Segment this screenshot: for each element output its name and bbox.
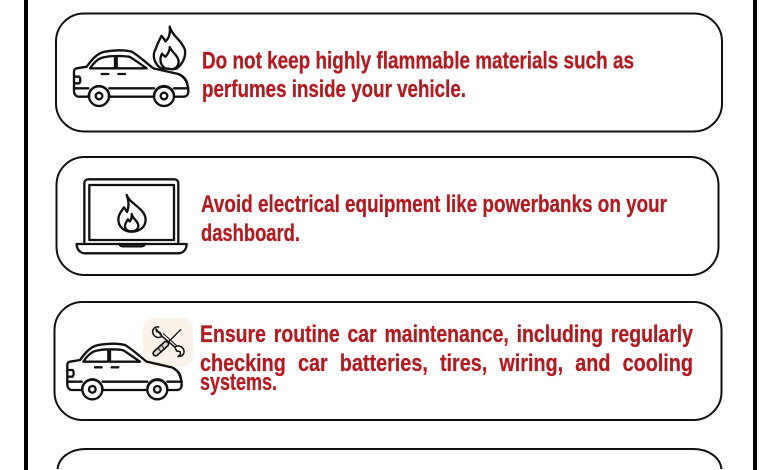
text: flammable materials: Do not keep highly flammable materials such as bbox=[202, 48, 634, 74]
text: electrical equipment: dashboard. bbox=[201, 220, 300, 247]
panel: flammable materials bbox=[56, 14, 722, 132]
icon: car bbox=[67, 344, 182, 399]
icon: laptop with flame bbox=[77, 179, 187, 253]
panel: next tip top edge bbox=[58, 449, 722, 469]
text: car maintenance: systems. bbox=[200, 369, 277, 396]
text: electrical equipment: Avoid electrical equipment like powerbanks on your bbox=[201, 191, 667, 218]
text: flammable materials: perfumes inside your vehicle. bbox=[202, 76, 466, 103]
icon: tools badge bbox=[143, 318, 193, 367]
panel: electrical equipment bbox=[56, 157, 718, 275]
icon: car on fire bbox=[74, 27, 188, 106]
text: car maintenance: checking car batteries, tires, wiring, and cooling bbox=[200, 350, 693, 377]
text: electrical equipment bbox=[201, 191, 667, 247]
text: flammable materials bbox=[202, 48, 634, 103]
panel: car maintenance bbox=[54, 302, 722, 420]
text: car maintenance bbox=[200, 321, 694, 396]
